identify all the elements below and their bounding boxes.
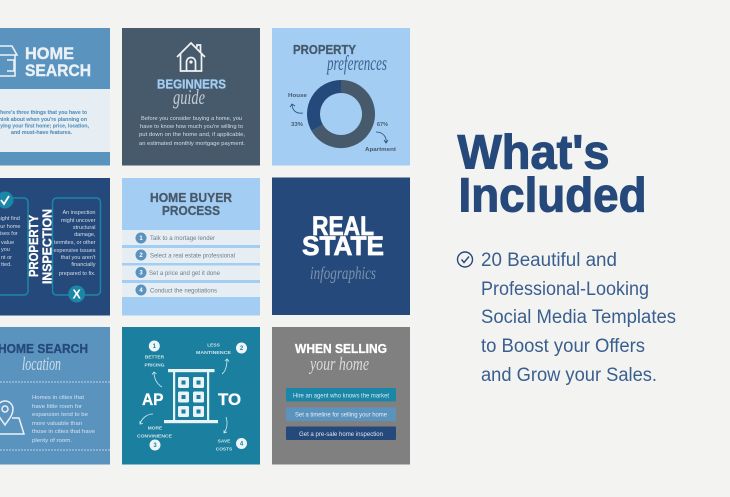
benefit labels: SAVE [218,438,231,444]
heading: property inspection vertical: PROPERTY [26,215,41,277]
title: Included [458,170,646,222]
text block: intro [0,110,89,136]
text block: beginners body: an estimated monthly mortgage payment. [139,141,245,147]
benefit labels: CONVINIENCE [137,434,173,440]
text block: right: that you aren't [61,255,96,261]
script: location: location [22,354,61,375]
arrows [140,359,229,433]
number badges: 1 [153,344,157,350]
benefit labels [137,342,233,452]
number badges [149,340,247,450]
arrow: apartment [376,132,388,143]
heading: home buyer process [150,191,232,218]
title: What's [458,126,610,180]
chart labels: Apartment [365,147,396,153]
text block: description [481,250,676,386]
icon: house outline [177,43,205,71]
benefit labels: BETTER [145,354,165,360]
text block: description: and Grow your Sales. [481,365,657,386]
text block: left: tted. [1,262,12,268]
text block: right: prepared to fix. [59,271,96,277]
benefit labels: LESS [207,342,221,348]
heading: home buyer process: HOME BUYER [150,191,232,205]
text block: location body: those in cities that have [32,429,95,435]
text block: location body: have little room for [32,404,82,410]
heading: home search: HOME SEARCH [0,342,88,356]
right outlined box [52,198,100,295]
text block: location body [32,395,95,444]
text block: right: expensive issues [54,248,96,254]
heading: home buyer process: PROCESS [162,204,220,218]
benefit labels: COSTS [216,446,233,452]
heading: property: PROPERTY [293,43,357,57]
steps text: Conduct the negotiations [150,288,218,294]
text block: right: structural [73,225,96,231]
text block: right [54,210,96,277]
text block: right: financially [71,262,96,268]
number badges: 4 [240,442,244,448]
panel: when selling card [272,327,410,464]
chart: donut [314,86,369,141]
panel: home search card [0,28,110,166]
script: infographics: infographics [310,263,376,283]
text block: location body: plenty of room. [32,438,72,444]
steps text: Set a price and get it done [149,270,220,277]
heading: real state: STATE [302,231,384,261]
heading: when selling: WHEN SELLING [295,342,387,356]
number badges: 2 [240,346,244,352]
text block: beginners body [139,116,245,147]
steps text [149,235,236,294]
panel: real state card [272,178,410,315]
text block: left: you [1,247,10,253]
icon: check circle [458,252,472,267]
heading: ap to: TO [218,390,241,409]
step badges: 3 [139,270,143,276]
button: hire an agent: Hire an agent who knows the market [293,392,389,400]
panel: home search location card [0,327,110,464]
text block: left [0,216,20,268]
text block: left: ises for [0,231,18,237]
button: set a timeline: Set a timeline for selling your home [295,412,387,418]
benefit labels: PRICING [144,362,165,368]
text block: description: Professional-Looking [481,279,649,300]
text block: right: might uncover [61,218,96,224]
chart labels: 33% [291,122,303,128]
heading: real state [302,211,384,261]
panel: property preferences card [272,28,410,166]
step badges: 4 [139,288,143,294]
chart labels: 67% [377,122,388,128]
heading: real state: REAL [312,211,374,241]
steps text: Talk to a mortage lender [150,235,216,242]
icon: storefront house [0,46,17,76]
text block: right: termites, or other [54,240,96,246]
number badges: 3 [153,443,157,449]
steps text: Select a real estate professional [150,252,236,260]
benefit labels: MANTINENCE [196,350,232,356]
script: guide: guide [173,85,205,109]
panel: apartment card [122,327,260,464]
text block: intro: and must-have features. [11,130,72,136]
text block: description: 20 Beautiful and [481,250,617,271]
heading: property inspection vertical: INSPECTION [40,209,54,284]
step badges [136,232,146,296]
heading: ap to: AP [142,390,164,409]
icon: x badge: X [73,288,82,302]
panel: home buyer process card [122,178,260,316]
heading: home search: SEARCH [25,61,91,80]
text block: location body: more valuable than [32,421,82,427]
panel: property inspection card [0,178,110,316]
arrow: house [290,104,303,113]
heading: ap to [142,390,241,409]
title [458,126,646,222]
text block: beginners body: put down on the home and, if applicable, [139,132,245,138]
chart labels [288,93,396,153]
icon: check badge [0,192,14,208]
text block: location body: expansion tend to be [32,412,88,418]
heading: home search [25,44,91,80]
text block: description: Social Media Templates [481,307,676,328]
panel: beginners guide card [122,28,260,166]
benefit labels: MORE [148,426,163,432]
text block: right: An inspection [62,210,96,216]
heading: property inspection vertical [26,209,54,284]
step badges: 2 [139,253,143,259]
chart labels: House [288,93,307,99]
script: preferences: preferences [326,51,387,75]
heading: home search: HOME [25,44,74,63]
icon: apartment building [164,369,218,423]
text block: left: nt or [1,255,12,261]
icon: map pin [0,401,24,434]
text block: beginners body: Before you consider buying a home, you [141,116,242,122]
left outlined box [0,198,28,295]
script: your home: your home [309,354,369,375]
text block: description: to Boost your Offers [481,336,645,357]
text block: beginners body: have to know how much you're willing to [140,124,243,130]
text block: location body: Homes in cities that [32,395,84,401]
button: pre-sale inspection: Get a pre-sale home inspection [299,431,383,438]
text block: right: damage, [74,232,96,238]
heading: beginners: BEGINNERS [157,76,226,92]
step badges: 1 [139,236,143,242]
text block: left: value [1,240,14,246]
